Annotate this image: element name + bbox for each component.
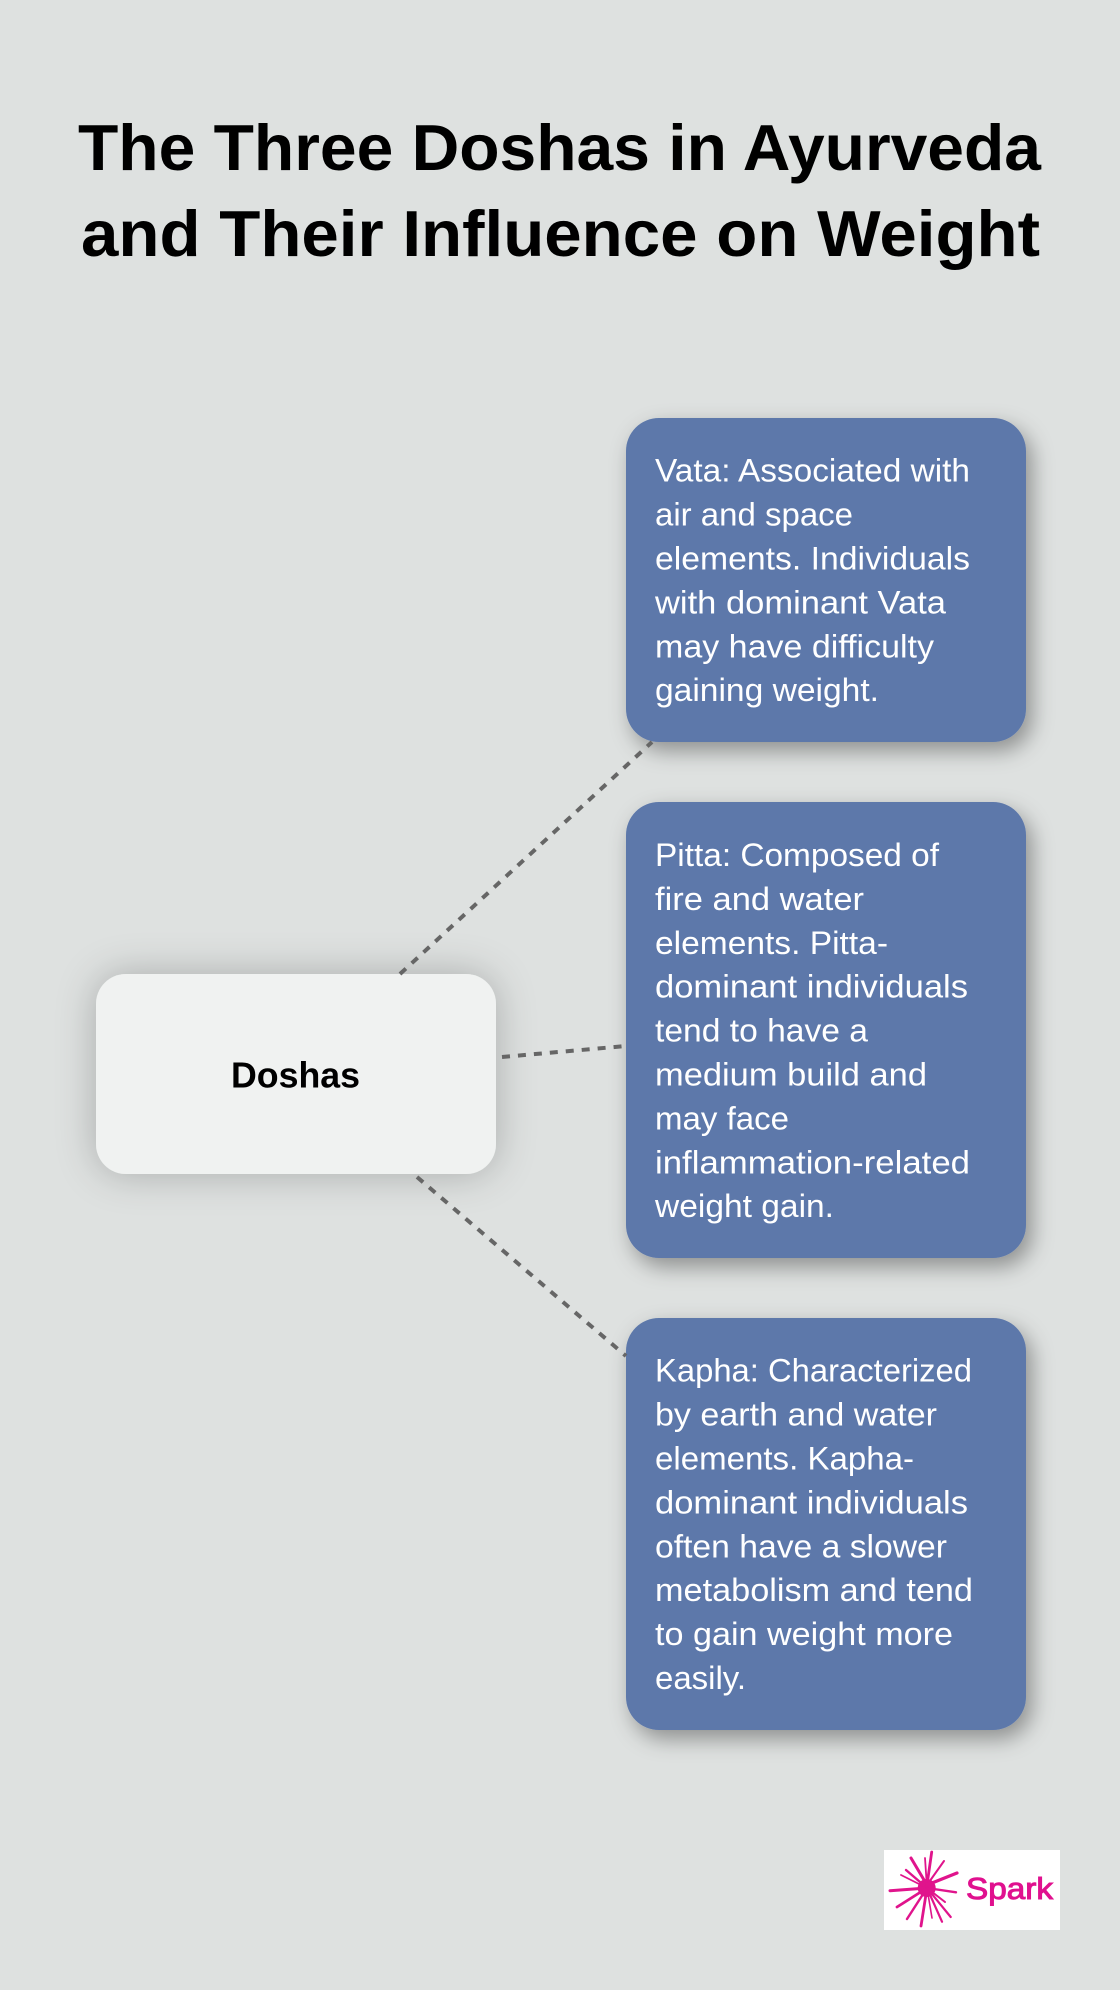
text: Vata description: may have difficulty — [655, 628, 935, 664]
label: Doshas: Doshas — [231, 1055, 360, 1096]
text: Pitta description: inflammation-related — [655, 1144, 970, 1180]
text: Pitta description: may face — [655, 1100, 789, 1136]
panel: Doshas central node — [96, 974, 496, 1174]
title — [78, 111, 1042, 270]
text: Kapha description: by earth and water — [655, 1397, 937, 1433]
text: Vata description — [654, 453, 970, 708]
text: Kapha description: often have a slower — [655, 1528, 947, 1564]
text: Vata description: with dominant Vata — [654, 584, 947, 620]
text: Vata description: Vata: Associated with — [655, 453, 970, 489]
text: Vata description: elements. Individuals — [655, 540, 970, 576]
title: and Their Influence on Weight — [81, 197, 1040, 270]
arrow: Doshas to Vata — [400, 742, 652, 974]
arrow: Doshas to Kapha — [417, 1177, 626, 1356]
panel: Vata — [626, 418, 1026, 742]
text: Pitta description: weight gain. — [654, 1188, 834, 1224]
panel: Kapha — [626, 1318, 1026, 1730]
text: Vata description: gaining weight. — [655, 672, 879, 708]
text: Pitta description: dominant individuals — [655, 969, 968, 1005]
text: Kapha description — [655, 1353, 973, 1696]
text: Kapha description: easily. — [655, 1660, 746, 1696]
logo: Spark — [884, 1850, 1060, 1930]
text: Pitta description: tend to have a — [655, 1013, 869, 1049]
text: Pitta description: fire and water — [655, 881, 864, 917]
panel: Pitta — [626, 802, 1026, 1258]
text: Vata description: air and space — [655, 497, 853, 533]
title: The Three Doshas in Ayurveda — [78, 111, 1042, 184]
wordmark: Spark: Spark — [966, 1871, 1054, 1906]
text: Kapha description: Kapha: Characterized — [655, 1353, 972, 1389]
text: Pitta description: medium build and — [655, 1056, 927, 1092]
text: Kapha description: to gain weight more — [655, 1616, 953, 1652]
icon: starburst — [890, 1852, 957, 1926]
arrow: Doshas to Pitta — [502, 1046, 626, 1057]
text: Pitta description: Pitta: Composed of — [655, 837, 940, 873]
text: Kapha description: elements. Kapha- — [655, 1440, 914, 1476]
text: Kapha description: dominant individuals — [655, 1484, 968, 1520]
text: Pitta description: elements. Pitta- — [655, 925, 888, 961]
text: Kapha description: metabolism and tend — [655, 1572, 973, 1608]
text: Pitta description — [654, 837, 970, 1224]
